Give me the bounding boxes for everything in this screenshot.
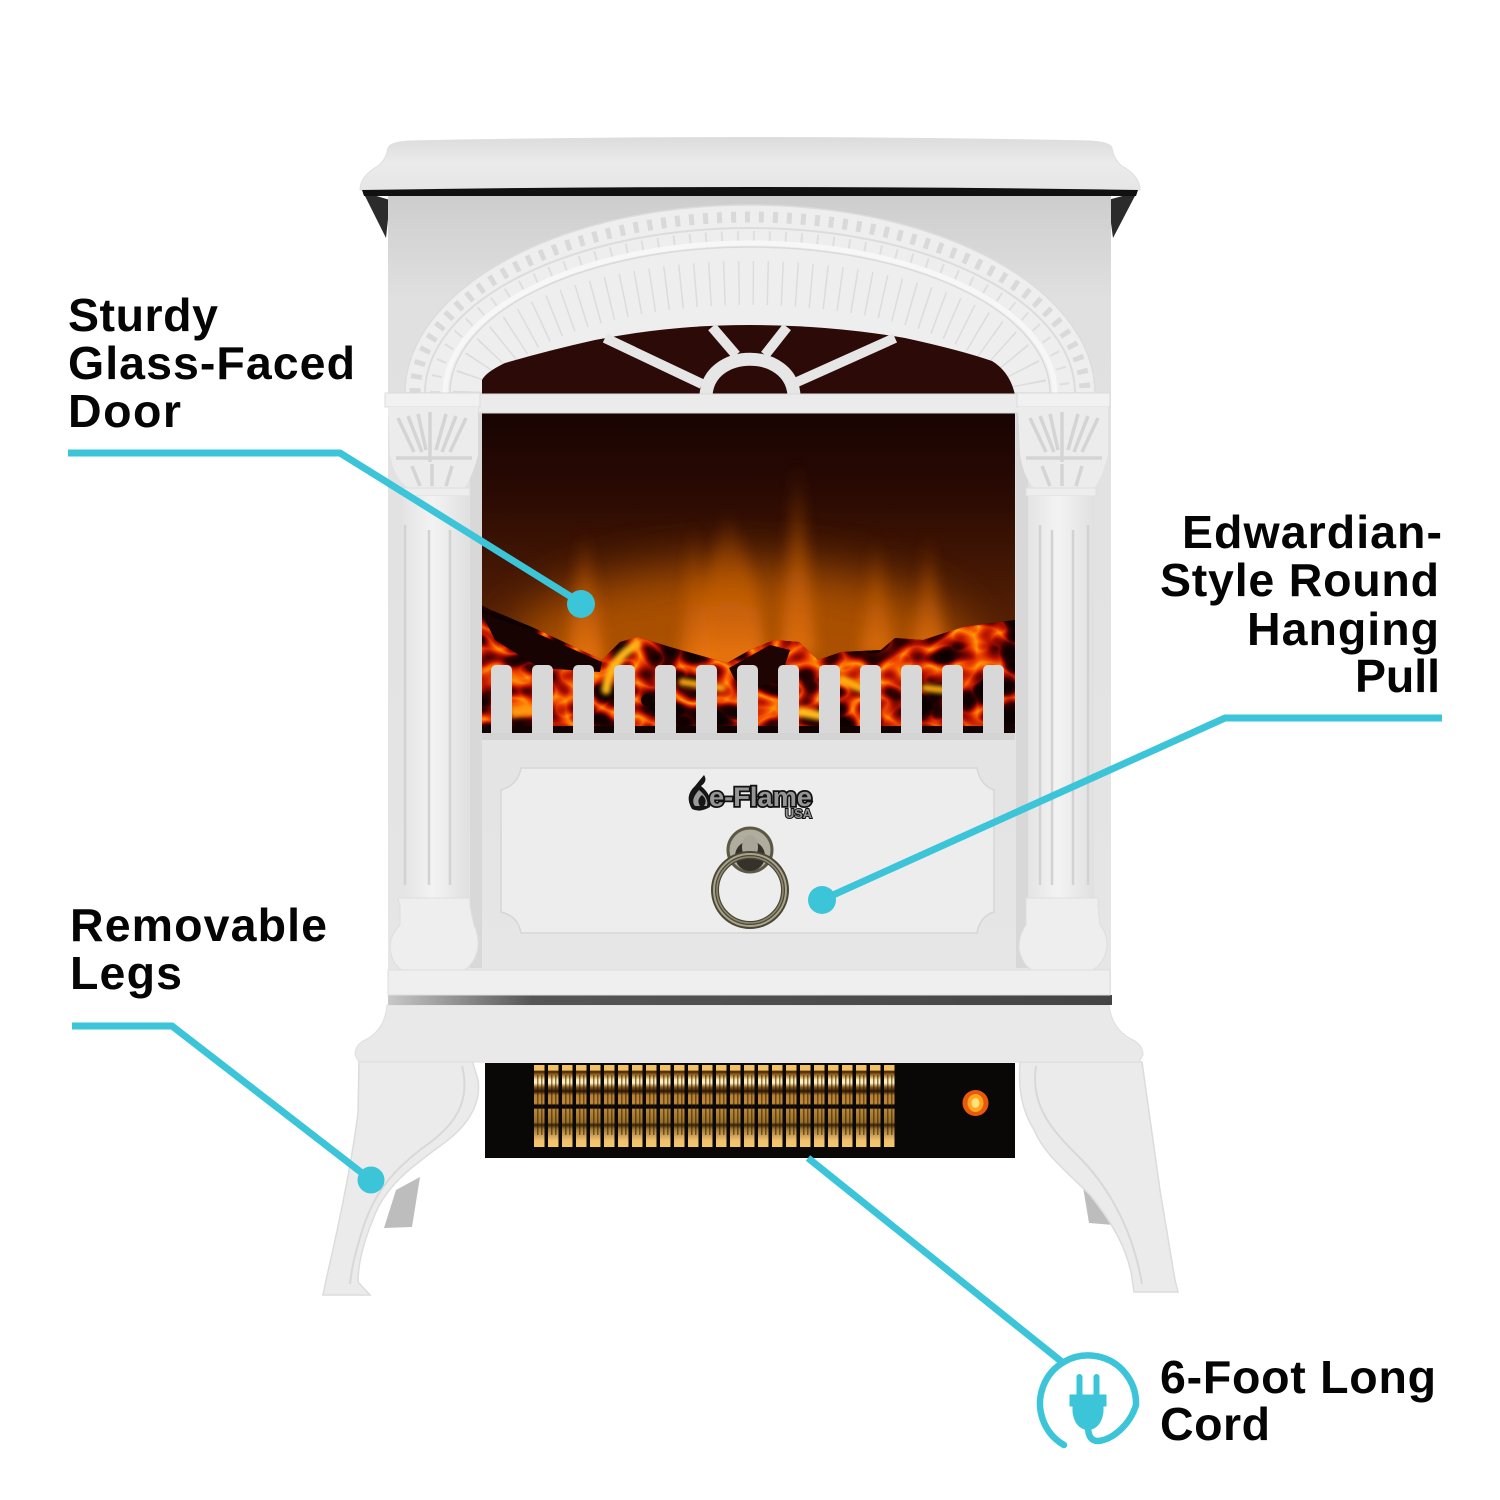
lower firebox [482, 413, 1015, 733]
leader line [822, 718, 1442, 900]
e-Flame logo [689, 775, 813, 821]
callout: 6-foot long cord [808, 1158, 1436, 1450]
indicator light [962, 1090, 988, 1116]
product: white electric stove fireplace [323, 138, 1178, 1295]
label [68, 289, 355, 437]
label [1160, 506, 1442, 702]
marker dot [808, 886, 836, 914]
arch [405, 205, 1095, 393]
leader line [808, 1158, 1062, 1362]
callout: round hanging pull [808, 506, 1442, 914]
stove body [388, 195, 1111, 995]
fireplace window with flames [481, 325, 1015, 735]
lower ledge [388, 970, 1110, 995]
marker dot [358, 1166, 384, 1194]
leader line [72, 1026, 371, 1180]
base shelf [355, 1005, 1143, 1062]
flames glow [497, 484, 988, 663]
heater panel [485, 1063, 1015, 1158]
horizontal door bar [478, 394, 1019, 413]
left leg [323, 1060, 478, 1295]
label: Glass-Faced [68, 337, 355, 389]
label [70, 899, 327, 999]
label: Edwardian- [1182, 506, 1442, 558]
marker dot [567, 590, 595, 618]
label: Style Round [1160, 554, 1439, 606]
right column [1016, 393, 1110, 971]
label: Door [68, 385, 181, 437]
decorative door panel [501, 768, 994, 933]
ring pull handle [714, 828, 786, 926]
callout: sturdy glass-faced door [68, 289, 595, 618]
callout: removable legs [70, 899, 384, 1194]
glowing logs [481, 600, 1015, 734]
arched upper window [482, 325, 1015, 395]
left column [385, 393, 482, 971]
heater grille [534, 1065, 897, 1147]
label: Removable [70, 899, 327, 951]
e-Flame logo: e-Flame [709, 782, 812, 812]
right leg [1020, 1062, 1178, 1292]
leader line [68, 453, 581, 603]
e-Flame logo: USA [785, 806, 813, 821]
stove lid [360, 138, 1140, 196]
side vents under lid [363, 192, 1137, 238]
label: Cord [1160, 1398, 1270, 1450]
label: Pull [1355, 650, 1440, 702]
label: Hanging [1247, 603, 1439, 655]
label: 6-Foot Long [1160, 1351, 1436, 1403]
icon: plug [1040, 1355, 1136, 1445]
label: Sturdy [68, 289, 218, 341]
label [1160, 1351, 1436, 1450]
fence grate [482, 665, 1015, 740]
back legs [384, 1175, 1114, 1228]
label: Legs [70, 947, 182, 999]
dark gap between body and base [388, 995, 1112, 1005]
sunburst muntins [605, 327, 895, 396]
